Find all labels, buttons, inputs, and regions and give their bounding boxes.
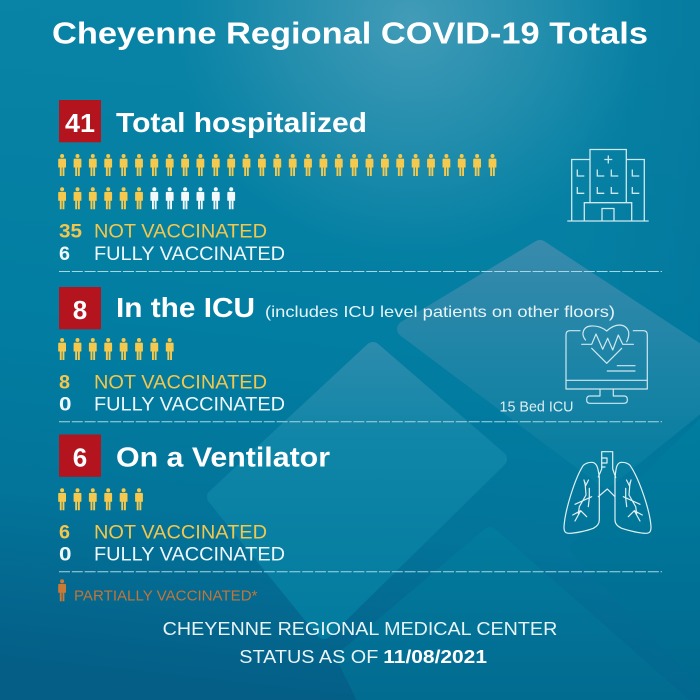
count badge: 6 xyxy=(59,434,101,477)
heading: on a ventilator: On a Ventilator xyxy=(116,442,330,473)
stat: 6 not vaccinated: NOT VACCINATED xyxy=(94,521,267,543)
heading: in the ICU: In the ICU xyxy=(116,292,255,323)
stat: 6 not vaccinated: 6 xyxy=(59,521,70,543)
panel: on a ventilator xyxy=(58,434,651,566)
pictogram: 8 people xyxy=(58,338,174,360)
stat: 35 not vaccinated: 35 xyxy=(59,220,82,242)
icon: lungs xyxy=(564,452,651,533)
stat: 35 not vaccinated: NOT VACCINATED xyxy=(94,220,267,242)
heading: total hospitalized: Total hospitalized xyxy=(116,107,367,138)
title: Cheyenne Regional COVID-19 Totals xyxy=(52,16,648,50)
count badge: 8 xyxy=(59,287,101,329)
pictogram: 41 people xyxy=(58,154,496,209)
stat: 0 fully vaccinated: 0 xyxy=(59,544,72,566)
label: 15 bed ICU: 15 Bed ICU xyxy=(500,400,574,416)
stat: 0 fully vaccinated: FULLY VACCINATED xyxy=(94,394,285,416)
count badge: 41: 41 xyxy=(65,108,95,138)
count badge: 41 xyxy=(59,100,101,142)
divider xyxy=(59,571,662,573)
stat: 6 fully vaccinated: 6 xyxy=(59,243,70,265)
stat: 8 not vaccinated: NOT VACCINATED xyxy=(94,371,267,393)
legend: partially vaccinated xyxy=(58,579,258,605)
panel: total hospitalized xyxy=(58,100,649,265)
icon: person xyxy=(58,579,66,601)
pictogram: 6 people xyxy=(58,488,143,510)
note: ICU level patients: (includes ICU level patients on other floors) xyxy=(265,304,615,321)
legend label: PARTIALLY VACCINATED* xyxy=(74,589,258,605)
stat: 6 fully vaccinated: FULLY VACCINATED xyxy=(94,243,285,265)
footer: source: CHEYENNE REGIONAL MEDICAL CENTER xyxy=(163,618,557,639)
count badge: 8: 8 xyxy=(73,295,87,325)
footer: source: STATUS AS OF xyxy=(239,646,378,667)
divider xyxy=(59,421,662,423)
footer: source xyxy=(163,618,557,667)
stat: 0 fully vaccinated: 0 xyxy=(59,394,72,416)
panel: in the ICU xyxy=(58,287,647,416)
icon: monitor with heart xyxy=(566,325,647,403)
divider xyxy=(59,270,662,272)
count badge: 6: 6 xyxy=(73,443,87,473)
stat: 8 not vaccinated: 8 xyxy=(59,371,70,393)
icon: hospital xyxy=(567,150,649,221)
stat: 0 fully vaccinated: FULLY VACCINATED xyxy=(94,544,285,566)
footer: source: 11/08/2021 xyxy=(383,646,487,667)
